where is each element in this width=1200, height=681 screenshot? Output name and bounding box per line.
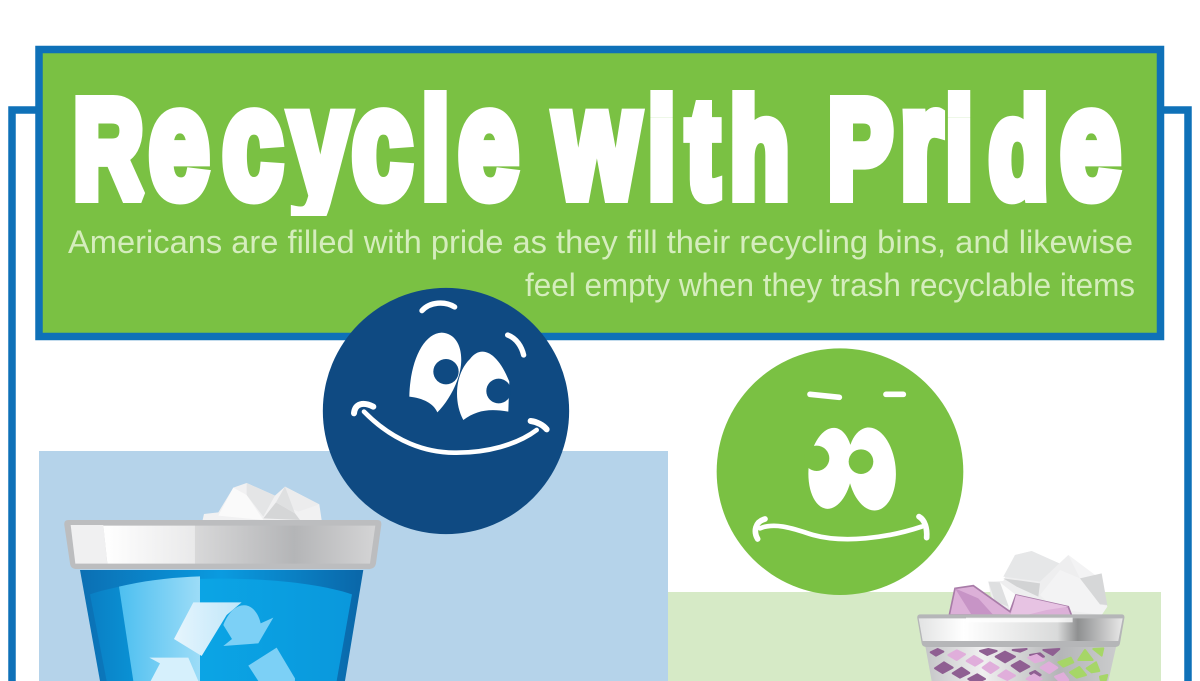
icon: happy blue face	[323, 288, 569, 534]
crumpled purple paper	[949, 586, 1072, 616]
title: R	[73, 73, 143, 227]
pupils	[804, 446, 873, 474]
basket rim	[917, 614, 1124, 647]
pupils	[433, 359, 511, 403]
panel: light green trash background	[668, 592, 1161, 681]
face circle	[323, 288, 569, 534]
title: P	[828, 73, 893, 227]
eyebrows	[810, 394, 903, 397]
face circle	[717, 348, 963, 595]
left eye	[409, 333, 461, 412]
wavy mouth	[755, 517, 927, 539]
title: id	[946, 73, 1048, 227]
crumpled white paper	[988, 551, 1107, 615]
title: r	[900, 59, 942, 230]
title: ecyc	[149, 59, 412, 230]
basket mesh openings	[931, 648, 1107, 681]
subtitle: Americans are filled with pride as they fill their recycling bins, and likewise	[68, 224, 1133, 260]
panel: light blue recycling background	[39, 451, 668, 681]
subtitle: feel empty when they trash recyclable items	[525, 267, 1135, 303]
icon: unhappy green face	[717, 348, 963, 595]
recycling arrows	[149, 602, 295, 681]
eyes	[805, 425, 900, 513]
bin rim	[64, 520, 381, 569]
title: l	[422, 73, 449, 227]
title	[75, 90, 1122, 216]
eyebrows	[422, 303, 524, 355]
title: ith	[648, 73, 832, 227]
crumpled paper	[203, 483, 322, 520]
title: e	[458, 59, 562, 230]
icon: blue recycling bin with paper	[64, 483, 381, 681]
right eye	[457, 352, 509, 420]
header banner	[39, 50, 1160, 336]
wire basket body	[925, 644, 1117, 681]
icon: wire trash basket with paper	[917, 551, 1124, 681]
title: e	[1060, 59, 1120, 230]
smile	[354, 404, 547, 453]
bin body	[80, 570, 363, 681]
subtitle	[68, 224, 1135, 303]
title: w	[554, 59, 639, 230]
